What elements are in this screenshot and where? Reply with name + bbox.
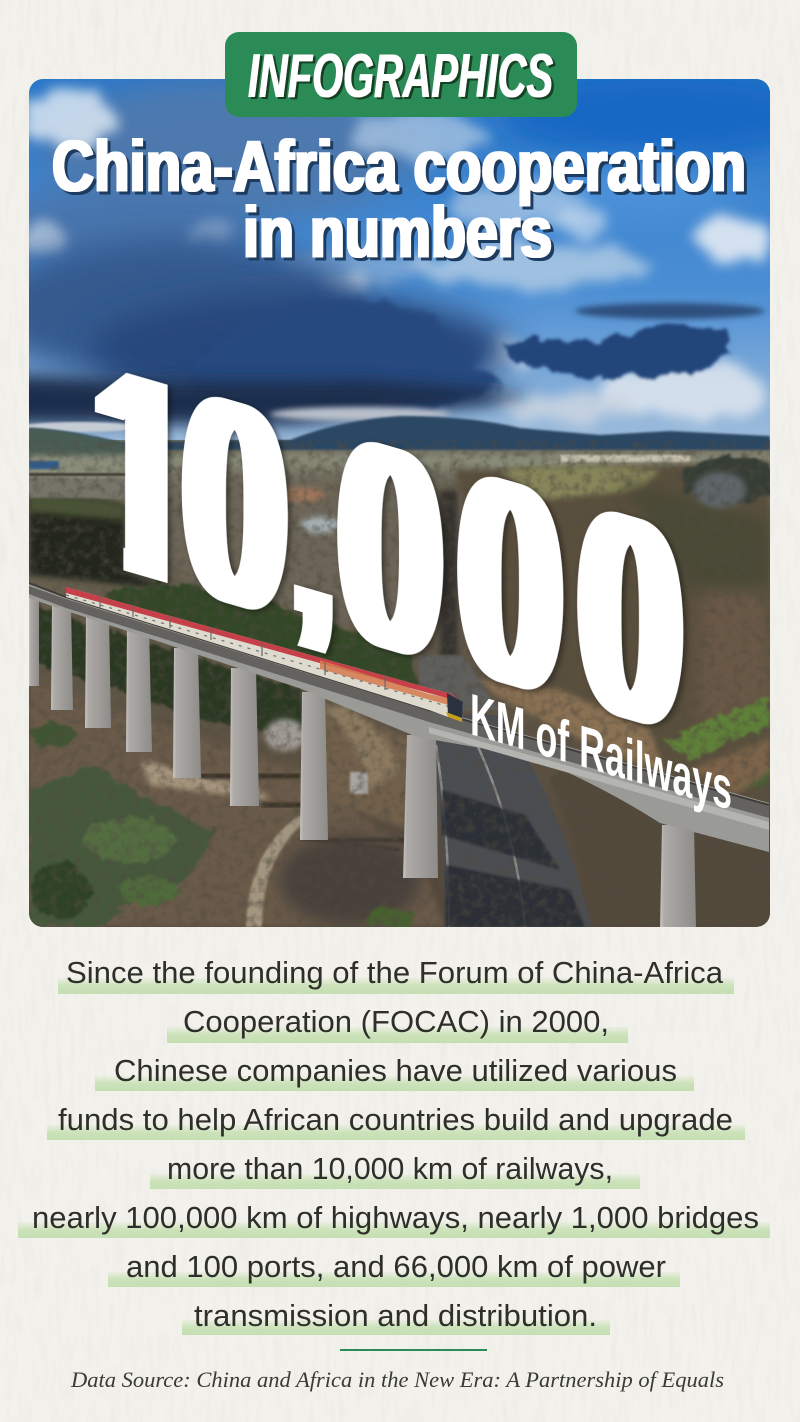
road above bridge <box>418 655 500 710</box>
right hillside <box>455 456 778 810</box>
far plain <box>29 455 770 500</box>
body text: transmission and distribution. <box>194 1298 597 1333</box>
body text: funds to help African countries build and upgrade <box>58 1102 733 1137</box>
lower ground <box>29 680 445 928</box>
body text: more than 10,000 km of railways, <box>167 1151 613 1186</box>
headline number: 10,000: 000 <box>340 367 681 801</box>
body text: Since the founding of the Forum of China-Africa <box>66 955 724 990</box>
badge: INFOGRAPHICS <box>225 32 577 117</box>
bridge deck <box>29 583 769 852</box>
body text: nearly 100,000 km of highways, nearly 1,000 bridges <box>32 1200 759 1235</box>
road markings <box>436 730 525 927</box>
land <box>29 440 770 930</box>
headline number: 10,000 <box>94 372 688 728</box>
badge: INFOGRAPHICS: INFOGRAPHICS <box>248 42 553 111</box>
divider <box>340 1349 487 1351</box>
data source: Data Source: China and Africa in the New Era: A Partnership of Equals <box>70 1367 724 1392</box>
title: in numbers <box>243 193 552 273</box>
headline number: 10,000: 10 <box>92 295 286 686</box>
body text <box>32 955 759 1333</box>
terrain grain <box>29 440 770 930</box>
headline number: 10,000: , <box>294 410 332 673</box>
bush <box>28 722 215 927</box>
body text: and 100 ports, and 66,000 km of power <box>126 1249 666 1284</box>
left dark slope and trees <box>29 478 420 690</box>
bridge piers <box>29 594 696 930</box>
train <box>66 587 463 722</box>
distant hills <box>29 416 770 462</box>
body text: Cooperation (FOCAC) in 2000, <box>183 1004 609 1039</box>
white clouds <box>24 88 770 422</box>
body text: Chinese companies have utilized various <box>114 1053 677 1088</box>
storm clouds <box>0 238 765 432</box>
photo: railway viaduct in Kenya <box>0 70 800 930</box>
middle valley <box>170 470 480 660</box>
sky <box>29 79 770 440</box>
road shadows <box>442 790 585 927</box>
text highlights <box>18 978 770 1335</box>
title <box>52 127 746 273</box>
vegetation under bridge <box>39 605 304 732</box>
road <box>420 715 592 927</box>
right lower ground <box>550 770 770 927</box>
